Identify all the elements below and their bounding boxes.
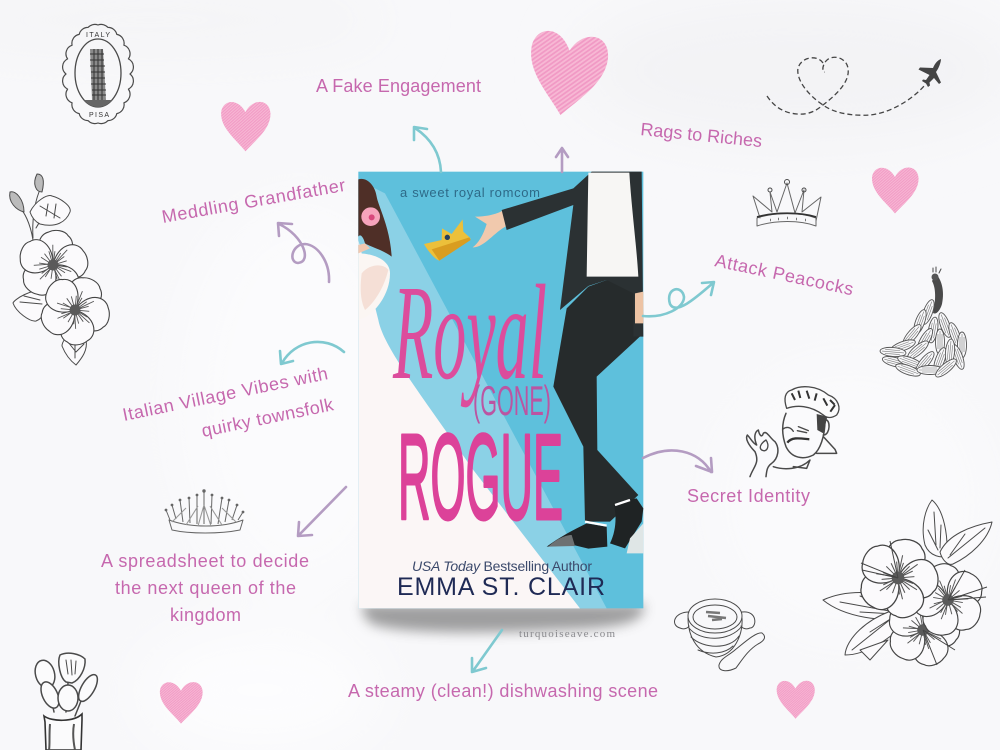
icon: kitchen utensils jar <box>32 653 101 750</box>
icon: right flowers <box>823 500 997 679</box>
panel: book cover: Royal <box>393 258 547 408</box>
cover tagline: a sweet royal romcom <box>400 185 540 200</box>
label: Secret Identity: Secret Identity <box>687 486 810 506</box>
label: Attack Peacocks: Attack Peacocks <box>713 250 855 299</box>
label: Rags to Riches: Rags to Riches <box>640 119 763 151</box>
arrow: attack peacocks <box>643 282 714 316</box>
icon: tiara <box>165 489 244 533</box>
panel: book cover <box>358 172 644 632</box>
arrow: meddling grandfather <box>278 223 329 282</box>
label: spreadsheet: A spreadsheet to decide <box>101 551 309 571</box>
book shadow <box>362 604 644 632</box>
label: spreadsheet <box>101 551 309 625</box>
icon: heart 1 <box>221 102 270 151</box>
watermark: turquoiseave.com <box>519 628 615 640</box>
arrow: Italian village <box>280 342 344 364</box>
label: Italian Village Vibes: Italian Village Vibes with <box>121 363 330 425</box>
stamp label: Italy: ITALY <box>86 32 110 39</box>
icon: chef <box>747 387 839 477</box>
icon: peacock <box>880 267 967 380</box>
label: spreadsheet: the next queen of the <box>115 578 296 598</box>
label: spreadsheet: kingdom <box>170 605 241 625</box>
cover title: (Gone): (GONE) <box>473 377 551 424</box>
label: Italian Village Vibes: quirky townsfolk <box>200 394 336 441</box>
icon: plane trail <box>767 57 941 115</box>
icon: heart 2 large <box>523 29 611 121</box>
arrow: rags to riches <box>556 148 568 172</box>
icon: airplane <box>918 59 941 87</box>
arrow: secret identity <box>643 450 712 472</box>
arrow: dishwashing <box>472 630 502 672</box>
stamp label: Pisa: PISA <box>89 112 109 119</box>
icon: heart 5 <box>777 681 815 719</box>
panel: book cover: ROGUE <box>398 409 563 545</box>
cover author name: EMMA ST. CLAIR <box>397 573 605 601</box>
label: Meddling Grandfather: Meddling Grandfather <box>160 175 347 227</box>
icon: left flowers <box>10 174 126 365</box>
icon: soup bowl and spoon <box>674 599 765 671</box>
label: dishwashing scene: A steamy (clean!) dishwashing scene <box>348 681 658 701</box>
arrow: fake engagement <box>414 127 441 172</box>
cover author tagline: USA Today Bestselling Author <box>412 558 592 574</box>
cover artwork <box>358 172 643 608</box>
icon: heart 3 <box>872 168 919 213</box>
label: A Fake Engagement: A Fake Engagement <box>316 76 481 96</box>
icon: Pisa stamp <box>63 24 133 124</box>
arrow: spreadsheet <box>298 487 346 536</box>
icon: crown <box>753 180 821 226</box>
icon: heart 4 <box>160 682 203 724</box>
